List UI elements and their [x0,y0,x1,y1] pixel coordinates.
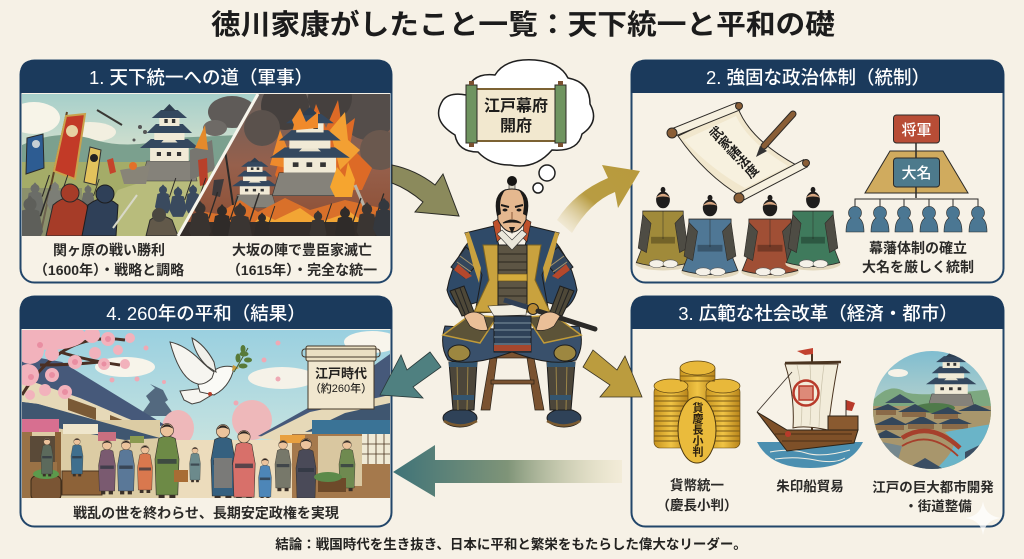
caption: Sekigahara: （1600年）・戦略と調略 [34,262,184,278]
caption: red seal ship trade: 朱印船貿易 [776,478,844,494]
box: daimyo: 大名 [901,165,932,182]
armor [498,245,527,305]
icon: scroll banner [466,81,566,147]
collar [497,230,527,250]
title: 徳川家康がしたこと一覧：天下統一と平和の礎 [211,8,835,40]
caption: bakuhan system: 幕藩体制の確立 [869,240,967,256]
arrow: from panel 1 to Ieyasu [392,165,459,216]
caption: Edo development: 江戸の巨大都市開発 [872,480,994,495]
heading: panel 4 [20,296,392,329]
stool [481,352,544,410]
caption: Osaka: 大坂の陣で豊臣家滅亡 [232,242,372,258]
icon: gold koban coins: 貨慶長小判 [691,401,704,458]
illustration: siege of Osaka [180,94,390,236]
icon: scroll of Buke Shohatto with brush [667,102,810,203]
heading: panel 1 [20,60,392,93]
caption: currency unification: （慶長小判） [656,497,738,513]
icon: scroll banner: 江戸幕府 [484,98,548,115]
arrow: from Ieyasu to panel 4 [380,352,441,398]
diagram: shogun and daimyo hierarchy [846,115,987,232]
panel 2: political system [631,60,1004,282]
heading: panel 3 [631,296,1004,329]
figure: Tokugawa Ieyasu seated on stool [443,176,595,427]
divider between the two battle scenes [178,94,258,236]
box: shogun: 将軍 [901,122,932,139]
caption: currency unification: 貨幣統一 [670,478,724,493]
heading: panel 2 [631,60,1004,93]
caption: result of peace: 戦乱の世を終わらせ、長期安定政権を実現 [73,505,339,521]
sword [504,300,595,329]
thought bubble: establishing the Edo shogunate [439,60,594,193]
arrow: from Ieyasu to panel 2 [557,165,640,233]
illustration: battle of Sekigahara [22,94,256,236]
hands [464,312,560,330]
panel 1: road to unification [8,60,402,282]
scroll: Edo period sign: （約260年） [310,381,372,395]
heading: panel 3: 3. 広範な社会改革（経済・都市） [678,303,958,324]
heading: panel 1: 1. 天下統一への道（軍事） [89,67,313,88]
icon: scroll of Buke Shohatto with brush: 武家諸法度 [706,124,762,183]
conclusion: 結論：戦国時代を生き抜き、日本に平和と繁栄をもたらした偉大なリーダー。 [275,536,747,552]
heading: panel 4: 4. 260年の平和（結果） [106,303,306,324]
panel 4: 260 years of peace [14,296,400,526]
box: shogun [894,115,940,143]
caption: bakuhan system: 大名を厳しく統制 [862,259,974,275]
scroll: Edo period sign [302,346,380,409]
seated daimyo figures [635,187,841,278]
panel 3: social reform [631,296,1004,526]
arrow: from panel 3 to panel 4 [393,445,622,497]
scroll: Edo period sign: 江戸時代 [315,366,367,381]
box: daimyo [894,158,940,187]
caption: Sekigahara: 関ヶ原の戦い勝利 [53,242,165,258]
icon: white dove with olive branch [170,338,252,404]
illustration: peaceful Edo street [22,330,390,498]
heading: panel 2: 2. 強固な政治体制（統制） [706,67,930,88]
arrow: from Ieyasu to panel 3 [583,350,642,397]
caption: Osaka: （1615年）・完全な統一 [227,262,377,278]
icon: Edo city [873,351,991,469]
head [496,176,528,234]
caption: Edo development: ・街道整備 [904,498,972,514]
icon: red seal ship [757,348,863,468]
watermark sparkle [965,501,1001,535]
icon: gold koban coins [654,361,740,463]
icon: scroll banner: 開府 [500,117,532,135]
